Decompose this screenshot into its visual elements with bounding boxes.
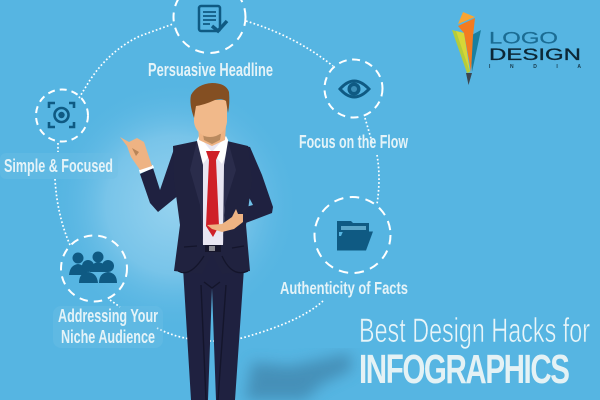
logo mark: pencil (452, 12, 481, 85)
step: Simple & Focused (4, 90, 113, 176)
icon: folder (337, 221, 373, 250)
pointing hand (120, 137, 152, 170)
icon: eye (338, 80, 371, 98)
left cuff (139, 165, 154, 174)
background glow behind figure (50, 70, 300, 340)
label: Authenticity of Facts: Authenticity of Facts (280, 278, 408, 298)
right arm (240, 146, 273, 224)
tie (206, 151, 220, 237)
right cuff (241, 213, 246, 225)
belt (205, 245, 221, 252)
logo word: LOGO: LOGO (489, 30, 558, 48)
neck (198, 125, 226, 146)
jacket (173, 141, 252, 274)
logo word: DESIGN: DESIGN (489, 46, 581, 64)
lower hand (207, 209, 243, 232)
jacket pockets (178, 246, 248, 273)
neck shadow (203, 134, 221, 144)
dashed circle: headline (174, 0, 246, 53)
collar (197, 136, 228, 164)
floor shadow (245, 353, 352, 400)
label: Simple & Focused: Simple & Focused (4, 156, 113, 176)
lapels (190, 141, 236, 245)
icon: document with check (199, 6, 227, 31)
hair (190, 83, 229, 118)
step: Authenticity of Facts (280, 197, 408, 298)
icon: group of people (69, 252, 117, 283)
title (359, 312, 590, 392)
icon: focus target (49, 103, 74, 127)
logo word: INDIA: INDIA (489, 64, 581, 70)
step: Focus on the Flow (299, 60, 409, 152)
dashed circle: simple (36, 90, 88, 142)
label: Addressing Your Niche Audience: Addressing Your (58, 306, 158, 326)
trousers (183, 245, 244, 400)
trouser creases (201, 282, 226, 400)
label: Persuasive Headline: Persuasive Headline (148, 60, 273, 80)
step: Addressing Your Niche Audience (58, 236, 158, 347)
label: Focus on the Flow: Focus on the Flow (299, 132, 409, 152)
step: Persuasive Headline (148, 0, 273, 80)
label: Addressing Your Niche Audience: Niche Audience (61, 327, 155, 347)
label: Addressing Your Niche Audience (58, 306, 158, 347)
shirt (197, 136, 228, 245)
title line 2: INFOGRAPHICS (359, 346, 570, 392)
dashed circle: flow (324, 60, 382, 118)
businessman figure (120, 83, 273, 400)
dotted connector ring (55, 21, 379, 341)
dashed circle: facts (314, 197, 390, 273)
left arm (140, 146, 190, 212)
logo: Logo Design India (452, 12, 581, 85)
label background patches (0, 153, 163, 348)
dashed circle: audience (61, 236, 127, 302)
face (194, 100, 227, 137)
